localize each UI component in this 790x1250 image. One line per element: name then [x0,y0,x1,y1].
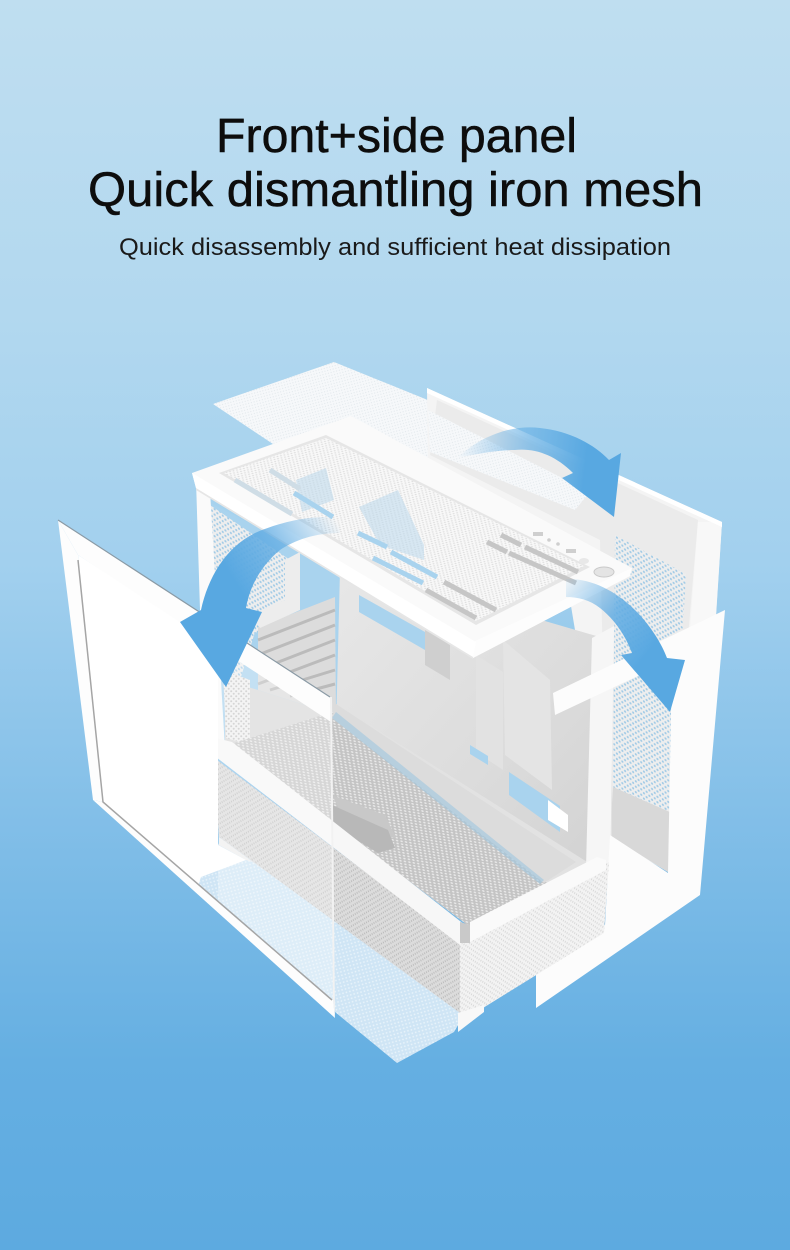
bottom mesh panel [190,835,470,1063]
front mesh panels [213,757,609,1032]
subtitle: Quick disassembly and sufficient heat dissipation [119,234,671,261]
rear post of case [196,480,225,750]
title: Front+side panel [216,110,577,163]
interior motherboard cutouts [359,595,568,832]
right side front panel frame [536,610,725,1008]
rear interior opening and PCI slots [205,500,340,760]
front IO buttons [533,532,614,577]
case back wall [336,560,610,865]
top mesh panel [213,362,445,475]
title [88,110,703,217]
bottom mesh floor [228,704,576,930]
exploded PC case illustration [58,362,725,1063]
blue tinted areas seen through mesh [296,468,424,560]
plate slots [235,470,578,618]
airflow arrow: left [180,517,340,687]
top plate of case [192,416,632,659]
front white bars [212,738,606,945]
airflow arrow: top right [458,427,621,517]
right front post [586,626,614,880]
airflow arrow: right [566,579,685,712]
wall foot and side fill [336,640,612,930]
title: Quick dismantling iron mesh [88,164,703,217]
rear side panel [427,388,722,872]
left glass side panel [58,520,335,1018]
